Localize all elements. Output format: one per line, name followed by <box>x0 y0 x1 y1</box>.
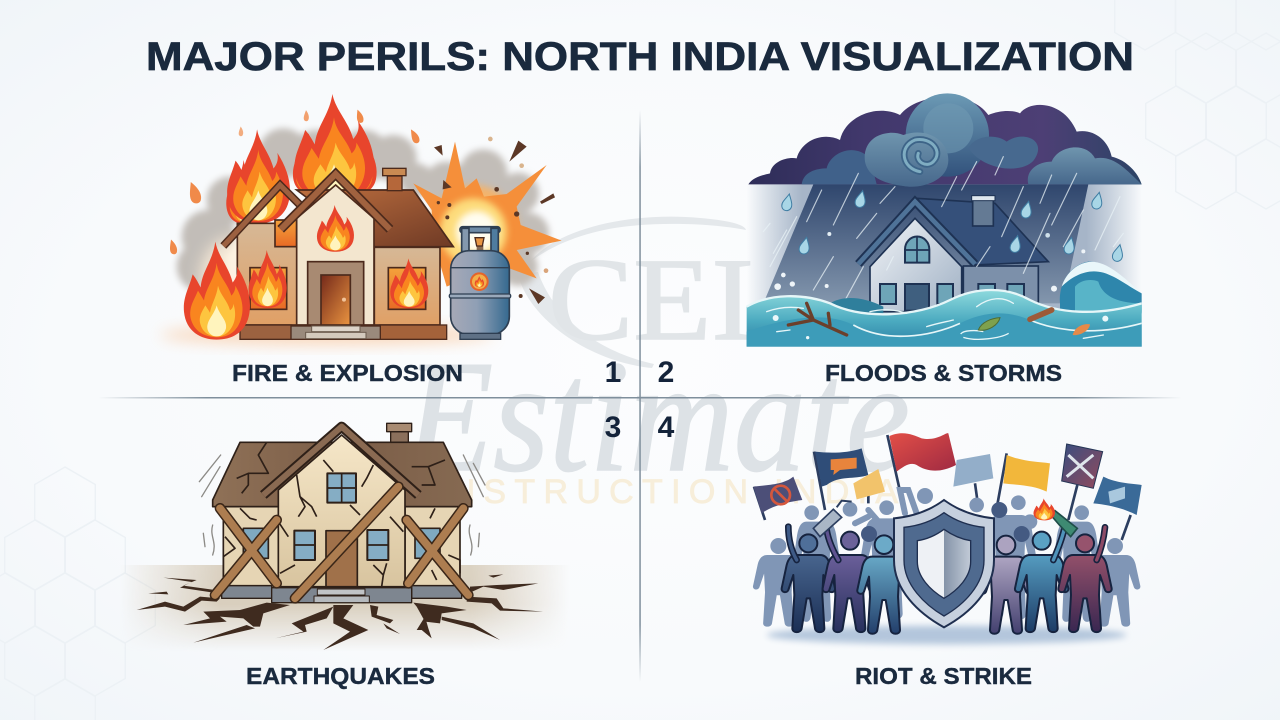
embers <box>168 109 421 255</box>
rain drops <box>774 191 1122 292</box>
ground shadow <box>767 626 1127 644</box>
debris: branch, log and leaves <box>788 303 1090 335</box>
panel 1: fire and explosion <box>160 94 562 386</box>
foreground flame <box>184 242 250 340</box>
panel 2: floods and storms <box>747 93 1142 386</box>
quadrant numbers: 3 <box>605 411 621 444</box>
rain streaks <box>763 157 1123 303</box>
back flames <box>226 94 377 224</box>
house <box>858 196 1048 312</box>
back crowd <box>753 488 1140 627</box>
storm clouds <box>748 93 1142 187</box>
illustration: braced cracked house <box>120 423 570 652</box>
house <box>223 168 453 339</box>
title: MAJOR PERILS: NORTH INDIA VISUALIZATION <box>146 35 1134 79</box>
illustration: flooded house under storm cloud <box>747 93 1142 347</box>
label: earthquakes: EARTHQUAKES <box>246 663 435 689</box>
quadrant numbers: 1 <box>605 356 621 389</box>
label: floods and storms: FLOODS & STORMS <box>825 360 1062 386</box>
flood water <box>747 262 1142 347</box>
flags and placards <box>753 433 1142 540</box>
illustration: crowd with flags around shield <box>753 433 1142 644</box>
quadrant numbers: 2 <box>658 356 674 389</box>
smoke and glow <box>160 128 549 345</box>
raised bottle <box>813 501 852 537</box>
panel 3: earthquakes <box>120 423 570 689</box>
watermark: CEI Estimate logo: CONSTRUCTION INDIA <box>383 473 898 511</box>
quadrant numbers: 4 <box>658 411 675 444</box>
illustration: burning house and gas cylinder <box>160 94 562 345</box>
cracked ground <box>120 565 570 652</box>
roof and wall cracks <box>223 442 460 587</box>
label: riot and strike: RIOT & STRIKE <box>855 663 1032 689</box>
quadrant numbers <box>605 356 675 444</box>
shield <box>894 500 994 627</box>
rain backdrop <box>747 184 1142 318</box>
gas cylinder <box>449 227 511 339</box>
watermark: CEI Estimate logo <box>383 217 910 511</box>
house <box>213 423 472 603</box>
label: fire and explosion: FIRE & EXPLOSION <box>232 360 463 386</box>
wooden braces <box>215 487 468 598</box>
front protesters <box>782 527 1112 634</box>
molotov bottle <box>1033 498 1077 537</box>
shake marks <box>199 455 485 555</box>
explosion burst <box>413 137 562 304</box>
panel 4: riot and strike <box>753 433 1142 689</box>
watermark: CEI Estimate logo: CEI <box>548 234 754 365</box>
watermark: CEI Estimate logo: Estimate <box>403 327 910 505</box>
quadrant divider lines <box>98 110 1182 682</box>
